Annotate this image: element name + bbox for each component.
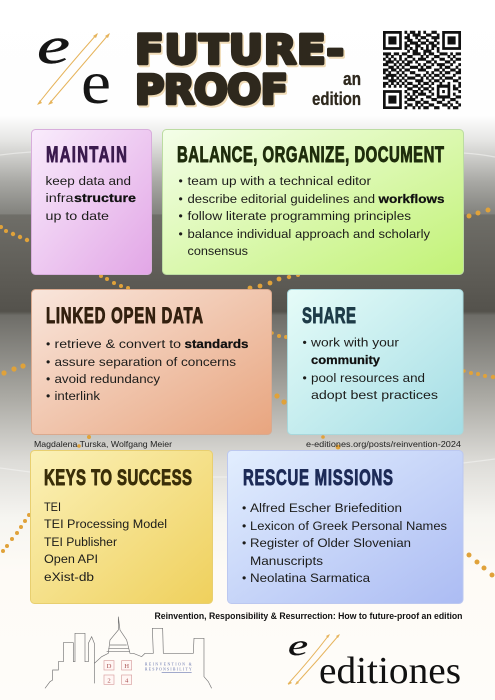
list: keys to success: TEI Publisher [44, 535, 117, 549]
list: balance: • [178, 209, 183, 223]
list: balance: describe editorial guidelines and [188, 192, 375, 206]
list: keys to success: Open API [44, 552, 98, 566]
text: maintain body: structure [74, 191, 136, 205]
list: rescue missions: • [242, 571, 246, 585]
logo: DH2024 skyline [45, 617, 212, 688]
list: rescue missions: Lexicon of Greek Personal Names [250, 519, 447, 533]
heading: rescue missions: RESCUE MISSIONS [243, 465, 393, 490]
list: keys to success [44, 500, 167, 584]
list: keys to success: TEI [44, 500, 61, 514]
list: balance: • [178, 227, 183, 241]
title: FUTURE- [135, 26, 344, 73]
panel: rescue missions [228, 450, 463, 604]
logo: DH2024 skyline: RESPONSIBILITY [145, 668, 192, 672]
list: rescue missions: • [242, 519, 246, 533]
text: maintain body [46, 174, 136, 223]
title [135, 26, 345, 116]
logo: DH2024 skyline: REINVENTION & [145, 662, 192, 666]
list: linked open data: • [46, 389, 50, 403]
list: balance: follow literate programming principles [188, 209, 411, 223]
list: linked open data: • [46, 337, 50, 351]
list: share: work with your [310, 336, 399, 350]
list: balance: • [178, 174, 183, 188]
heading: maintain: MAINTAIN [46, 142, 127, 167]
list: share: adopt best practices [311, 388, 438, 402]
text: maintain body: up to date [46, 209, 109, 223]
list: balance: balance individual approach and scholarly [188, 227, 431, 241]
list: share: • [302, 371, 307, 385]
list: linked open data: assure separation of concerns [54, 355, 236, 369]
list: rescue missions: Register of Older Slovenian [250, 536, 411, 550]
panel: balance, organize, document [162, 130, 464, 274]
title: FUTURE- [136, 28, 345, 75]
list: share [302, 336, 438, 402]
decorative dotted paths [0, 208, 495, 578]
list: keys to success: TEI Processing Model [44, 517, 167, 531]
list: linked open data: standards [184, 337, 249, 351]
list: keys to success: eXist-db [44, 570, 94, 584]
text: maintain body: infra [46, 191, 74, 205]
list: balance: workflows [377, 192, 445, 206]
credit: authors: Magdalena Turska, Wolfgang Meier [34, 439, 172, 449]
list: balance [178, 174, 445, 258]
list: linked open data: interlink [54, 389, 101, 403]
subtitle: an edition [312, 69, 361, 109]
logo: DH2024 skyline: 4 [125, 677, 129, 684]
list: balance: consensus [188, 244, 248, 258]
list: rescue missions: Alfred Escher Briefedition [250, 501, 402, 515]
panel: share [288, 290, 463, 434]
logo: DH2024 skyline: H [124, 663, 129, 670]
heading: balance, organize, document: BALANCE, ORGANIZE, DOCUMENT [177, 142, 444, 167]
subtitle: an edition: edition [312, 89, 361, 109]
list: rescue missions: • [242, 536, 246, 550]
logo: e-editiones [288, 629, 461, 692]
logo: e-editiones: e [288, 629, 308, 662]
text: maintain body: keep data and [46, 174, 131, 188]
list: linked open data: avoid redundancy [54, 372, 161, 386]
list: rescue missions [242, 501, 447, 585]
list: linked open data [46, 337, 249, 403]
list: linked open data: • [46, 372, 50, 386]
subtitle: an edition: an [343, 69, 361, 89]
list: rescue missions: Manuscripts [250, 554, 323, 568]
QR code [383, 31, 461, 109]
logo: e/e: e [81, 50, 111, 117]
title: PROOF [135, 68, 288, 114]
talk title: Reinvention, Responsibility & Resurrection: How to future-proof an edition [154, 611, 462, 621]
list: rescue missions: • [242, 501, 246, 515]
title: PROOF [136, 70, 290, 116]
panel: maintain [32, 130, 152, 274]
logo: e/e [37, 18, 111, 117]
panel: keys to success [30, 450, 212, 604]
panel: linked open data [32, 290, 272, 434]
heading: share: SHARE [302, 303, 356, 328]
list: linked open data: • [46, 355, 50, 369]
heading: linked open data: LINKED OPEN DATA [46, 303, 203, 328]
list: balance: team up with a technical editor [188, 174, 371, 188]
list: balance: • [178, 192, 183, 206]
logo: DH2024 skyline: D [107, 663, 112, 670]
logo: DH2024 skyline: 2 [107, 677, 111, 684]
list: share: pool resources and [311, 371, 425, 385]
list: linked open data: retrieve & convert to [54, 337, 181, 351]
logo: e/e: e [37, 18, 70, 75]
credit: url: e-editiones.org/posts/reinvention-2024 [306, 439, 461, 449]
list: rescue missions: Neolatina Sarmatica [250, 571, 370, 585]
logo: e-editiones: editiones [319, 650, 461, 692]
list: share: community [311, 353, 380, 367]
heading: keys to success: KEYS TO SUCCESS [44, 465, 192, 490]
list: share: • [302, 336, 307, 350]
